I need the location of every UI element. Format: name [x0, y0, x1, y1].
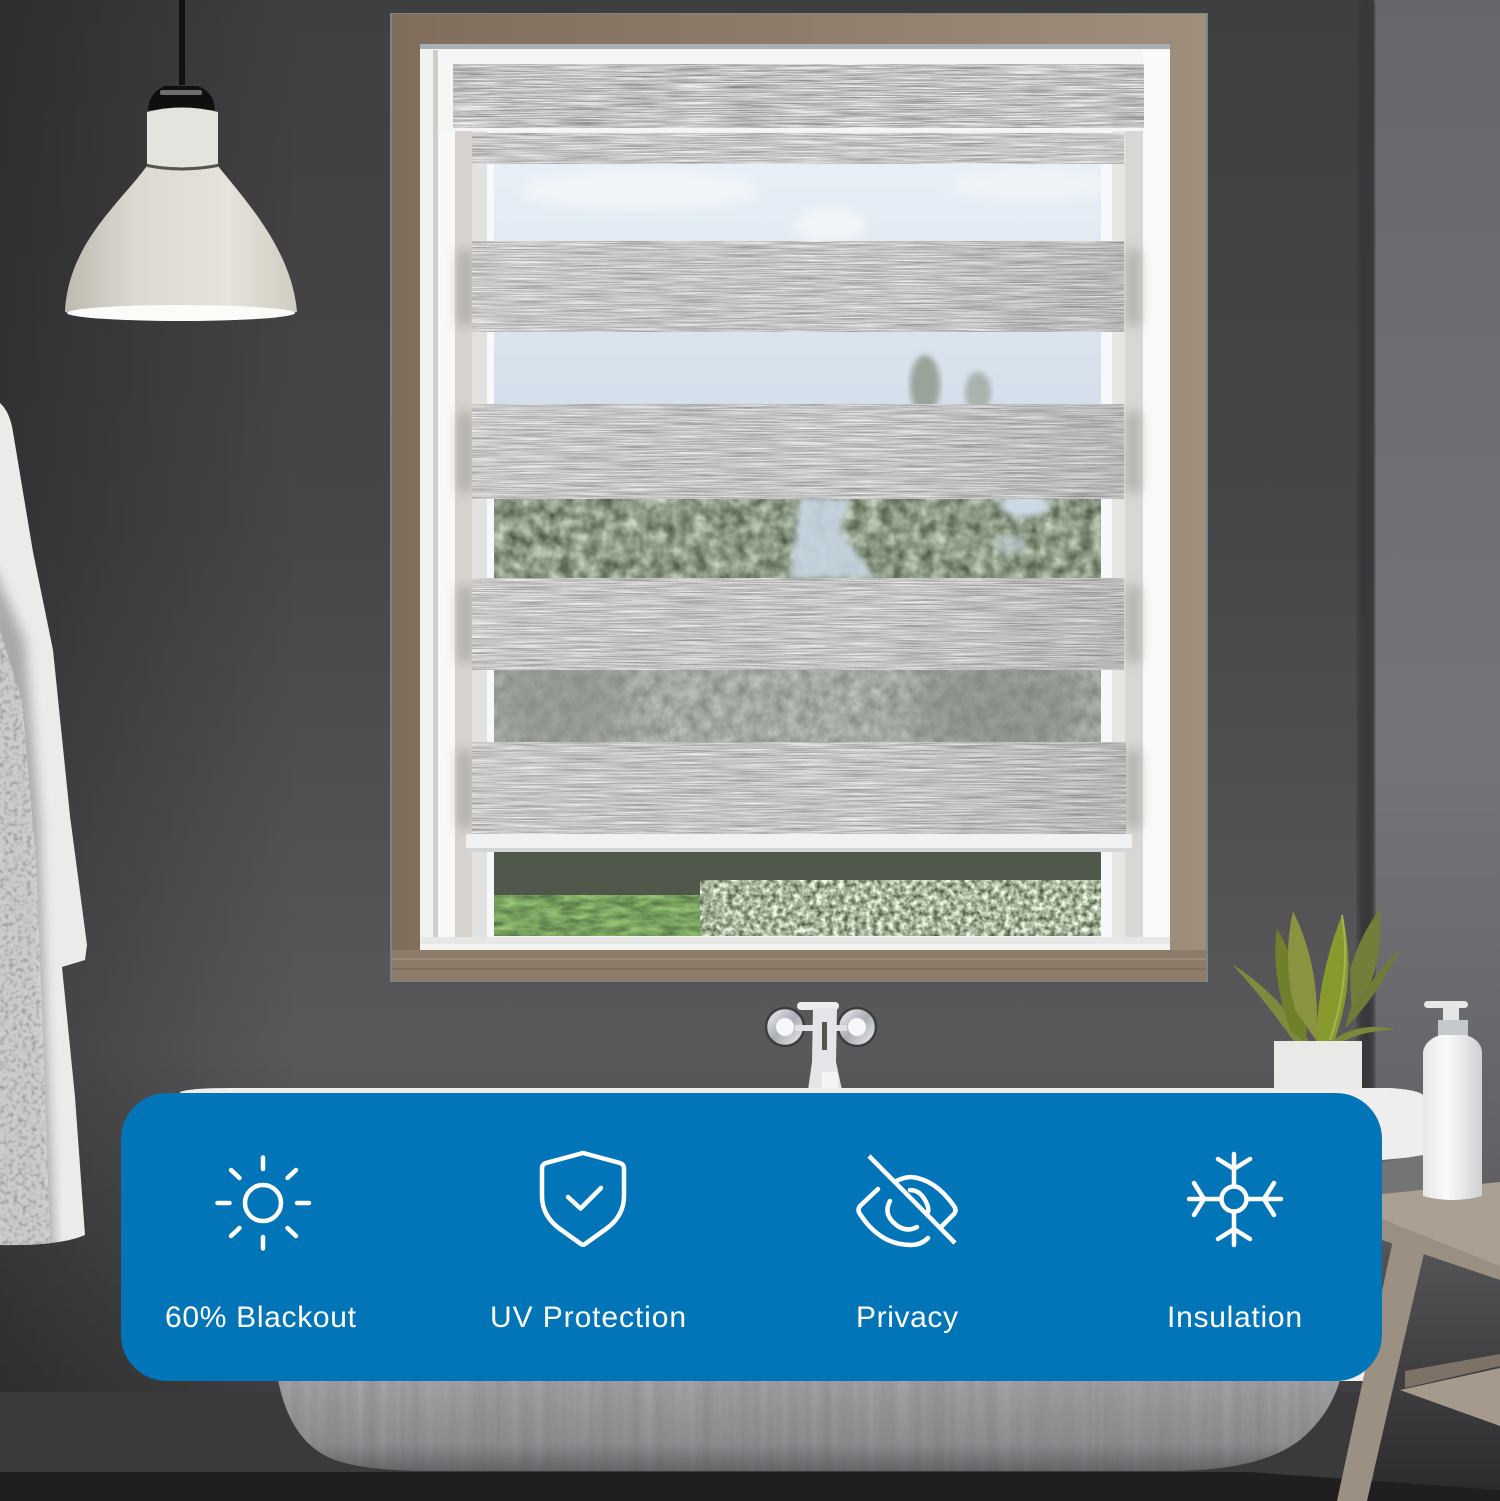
stripe: headrail valance	[453, 64, 1144, 128]
stripe shading	[472, 241, 1126, 835]
label: 60% Blackout: 60% Blackout	[165, 1301, 357, 1334]
faucet	[766, 1002, 876, 1090]
towel	[0, 400, 90, 1255]
icon: shield with check	[542, 1153, 624, 1245]
tree band	[488, 498, 1108, 582]
shadows on window jambs	[458, 250, 1140, 828]
stripe 3	[472, 404, 1124, 499]
window frame	[390, 13, 1208, 982]
stripe 5	[472, 742, 1126, 835]
stripe 2	[472, 241, 1124, 332]
plant pot	[1274, 1041, 1362, 1089]
bottom rail	[466, 834, 1132, 852]
label: Insulation: Insulation	[1167, 1301, 1302, 1334]
garden band	[494, 852, 1101, 895]
table	[1337, 1182, 1500, 1501]
soap bottle	[1423, 1001, 1482, 1200]
window view	[488, 160, 1110, 940]
icon: snowflake	[1189, 1154, 1281, 1245]
stripe 4	[472, 578, 1124, 670]
blind fabric stripes	[438, 50, 1144, 852]
feature panel	[121, 1093, 1382, 1381]
hazy band	[488, 668, 1108, 744]
icon: sun	[218, 1158, 309, 1248]
stripe 1	[472, 133, 1124, 164]
plant	[1232, 909, 1400, 1043]
pendant lamp	[65, 0, 297, 321]
valance surround	[438, 50, 1143, 131]
sky	[494, 164, 1101, 404]
icon: crossed-out eye	[858, 1156, 956, 1245]
label: Privacy: Privacy	[856, 1301, 958, 1334]
bathtub	[180, 1088, 1424, 1471]
label: UV Protection: UV Protection	[490, 1301, 686, 1334]
